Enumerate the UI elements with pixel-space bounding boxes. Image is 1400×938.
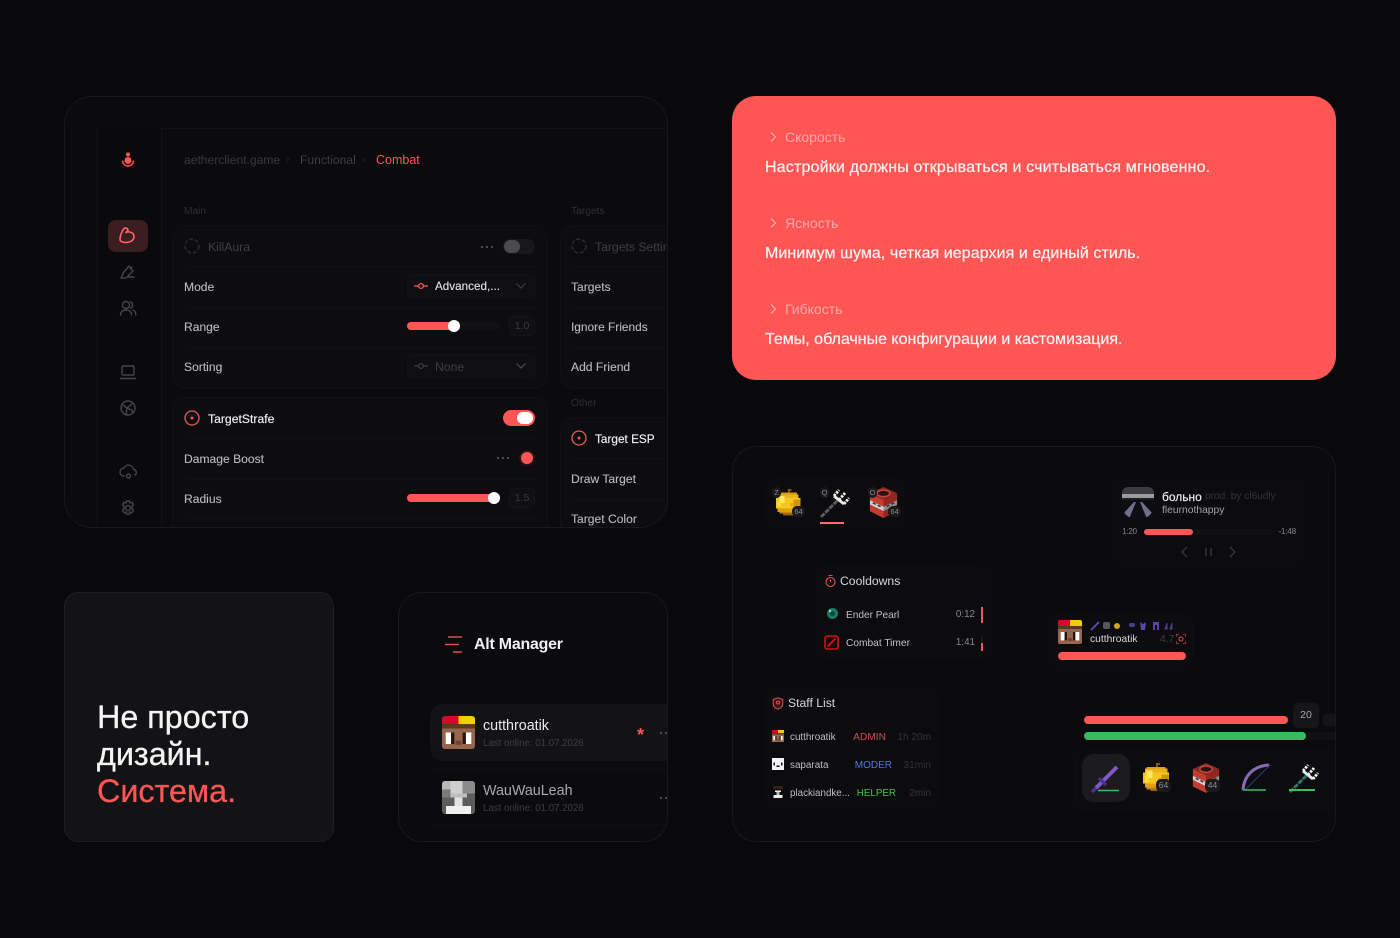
- title: больно: [1162, 490, 1202, 504]
- progress bar: [1144, 529, 1273, 535]
- panel: staff list: plackiandke...: [790, 788, 850, 799]
- label: Sorting: Sorting: [184, 360, 222, 374]
- label: Add Friend: Add Friend: [571, 360, 630, 374]
- avatar: [1058, 620, 1082, 644]
- icon: stopwatch: [826, 575, 836, 587]
- panel: cooldowns: [817, 566, 990, 658]
- heading: Alt Manager: Alt Manager: [474, 636, 563, 653]
- icon: dashed circle: [184, 238, 200, 254]
- panel: TargetStrafe settings: [172, 397, 548, 547]
- value: 1.5: 1.5: [515, 492, 529, 504]
- badge: count 64: [1156, 779, 1171, 792]
- panel: music player: [1114, 479, 1302, 566]
- asterisk: *: [637, 725, 644, 745]
- producer: prod. by cl6udly: [1205, 491, 1276, 502]
- name: WauWauLeah: [483, 783, 573, 799]
- badge: key Z: [772, 487, 781, 498]
- icon: players: [120, 300, 136, 316]
- badge: count 44: 44: [1208, 780, 1217, 790]
- durability bar: [820, 522, 844, 524]
- timer: 1:41: 1:41: [956, 637, 975, 648]
- icon: movement: [120, 265, 135, 279]
- slider: Range: [407, 322, 500, 330]
- label: TargetStrafe: TargetStrafe: [208, 412, 274, 426]
- heading: Main: Main: [184, 206, 206, 217]
- heading: slogan: дизайн.: [97, 736, 212, 772]
- badge: key O: O: [870, 488, 875, 497]
- icon: target: [571, 430, 587, 446]
- label: Combat Timer: Combat Timer: [846, 638, 910, 649]
- item: golden apple: [776, 489, 800, 516]
- icon: logo: [122, 152, 134, 167]
- album cover: [1122, 487, 1154, 518]
- badge: count: 64: [890, 507, 899, 516]
- panel: client settings window: [64, 96, 668, 528]
- time remaining: -1:48: [1278, 527, 1296, 536]
- slot: TNT: [1192, 763, 1220, 793]
- icon: shield: [772, 697, 784, 710]
- item: trident: [820, 489, 850, 518]
- dots: [660, 797, 669, 799]
- label: Damage Boost: Damage Boost: [184, 452, 264, 466]
- value: 1.0: [509, 316, 535, 336]
- principle: clarity: Минимум шума, четкая иерархия и единый стиль.: [765, 245, 1140, 262]
- slot: golden apple: [1143, 763, 1169, 791]
- icon: menu lines: [445, 636, 462, 653]
- dropdown: None: None: [435, 360, 464, 374]
- name: cutthroatik: [1090, 634, 1138, 645]
- principle: clarity: Ясность: [785, 215, 838, 231]
- slot: selected sword: [1082, 754, 1130, 802]
- value: 1.5: [509, 488, 535, 508]
- label: Targets: Targets: [571, 280, 611, 294]
- row: cutthroatik: [772, 730, 784, 742]
- label: Target Color: Target Color: [571, 512, 637, 526]
- panel: staff list: HELPER: [857, 788, 896, 799]
- heading: Cooldowns: Cooldowns: [840, 574, 900, 588]
- armor icons: [1090, 621, 1172, 631]
- rating: 4.7: [1160, 634, 1174, 645]
- badge: count 44: [1205, 779, 1220, 792]
- slider: Radius: [407, 494, 500, 502]
- badge: count 64: 64: [1159, 780, 1168, 790]
- panel: staff list: 31min: [904, 760, 931, 771]
- heading: Staff List: Staff List: [788, 696, 835, 710]
- panel: alt manager: [398, 592, 668, 842]
- panel: staff list: cutthroatik: [790, 732, 836, 743]
- last online: Last online: 01.07.2026: [483, 803, 584, 814]
- icon: target: [184, 410, 200, 426]
- breadcrumb: [184, 153, 420, 167]
- row: saparata: [772, 758, 784, 770]
- icon: active combat tab: [108, 220, 148, 252]
- panel: slogan card: [64, 592, 334, 842]
- principle: clarity: [765, 215, 1140, 262]
- badge: count: [792, 506, 805, 517]
- dropdown: Advanced: Advanced,...: [435, 280, 500, 293]
- panel: staff list: saparata: [790, 760, 828, 771]
- heading: Other: Other: [571, 398, 596, 409]
- label: Ignore Friends: Ignore Friends: [571, 320, 648, 334]
- principle: speed: [765, 129, 1210, 176]
- avatar: [442, 716, 475, 749]
- dropdown: Advanced: [407, 274, 535, 298]
- heading: Targets: Targets: [571, 206, 604, 217]
- principle: flexibility: [765, 301, 1122, 348]
- slot: bow: [1242, 764, 1270, 791]
- row: plackiandke: [774, 786, 782, 798]
- value: 20: [1293, 703, 1319, 728]
- value: 1.0: 1.0: [515, 320, 529, 332]
- label: KillAura: KillAura: [208, 240, 250, 254]
- label: Target ESP: Target ESP: [595, 432, 655, 446]
- value: 20: 20: [1300, 709, 1312, 721]
- icon: combat timer: [824, 635, 839, 650]
- health bar: [1058, 652, 1186, 660]
- heading: slogan: [97, 699, 249, 809]
- badge: key Q: Q: [822, 488, 827, 497]
- row: WauWauLeah: [442, 781, 667, 814]
- badge: key Z: Z: [774, 488, 779, 497]
- panel: coral principles card: [732, 96, 1336, 380]
- panel: hotbar: [1075, 750, 1337, 811]
- label: Draw Target: Draw Target: [571, 472, 636, 486]
- badge: key O: [868, 487, 877, 498]
- panel: staff list: 2min: [909, 788, 931, 799]
- toggle: off: [503, 239, 535, 254]
- icon: laptop: [120, 365, 136, 380]
- breadcrumb: aetherclient.game: [184, 153, 280, 167]
- hunger bar: [1084, 732, 1337, 740]
- toggle: on: [503, 410, 535, 426]
- panel: staff list: [765, 688, 938, 809]
- sidebar: [97, 128, 162, 548]
- avatar: [442, 781, 475, 814]
- panel: KillAura settings: [172, 225, 548, 389]
- panel: target HUD: [1049, 613, 1193, 669]
- badge: count: [888, 506, 901, 517]
- badge: key Q: [820, 487, 829, 498]
- heading: slogan: Система.: [97, 773, 236, 809]
- dots menu: [481, 246, 495, 248]
- panel: hotkey items: [765, 478, 904, 529]
- artist: fleurnothappy: [1162, 505, 1224, 516]
- icon: ender pearl: [827, 608, 838, 619]
- slot: trident: [1289, 764, 1319, 793]
- badge: count: 64: [794, 507, 803, 516]
- indicator: red dot: [521, 452, 533, 464]
- label: Radius: Radius: [184, 492, 222, 506]
- panel: Other list: [560, 417, 690, 547]
- label: Range: Range: [184, 320, 220, 334]
- last online: Last online: 01.07.2026: [483, 738, 584, 749]
- heading: slogan: Не просто: [97, 699, 249, 735]
- cooldown bar: [981, 635, 983, 651]
- breadcrumb: Combat: [376, 153, 420, 167]
- breadcrumb: ›: [286, 154, 290, 166]
- durability bar: [1289, 789, 1315, 791]
- dots menu: [497, 457, 511, 459]
- icon: globe: [120, 400, 136, 416]
- panel: staff list: MODER: [855, 760, 892, 771]
- dots: [660, 732, 669, 734]
- cooldown bar: [981, 607, 983, 623]
- player controls: [1181, 546, 1236, 558]
- timer: 0:12: 0:12: [956, 609, 975, 620]
- icon: cloud config: [119, 464, 137, 479]
- panel: HUD elements: [732, 446, 1336, 842]
- row: cutthroatik: [430, 704, 670, 761]
- breadcrumb: ›: [362, 154, 366, 166]
- panel: staff list: 1h 20m: [897, 732, 931, 743]
- principle: flexibility: Темы, облачные конфигурации и кастомизация.: [765, 331, 1122, 348]
- panel: staff list: ADMIN: [853, 732, 886, 743]
- label: Mode: Mode: [184, 280, 214, 294]
- item: TNT: [870, 487, 898, 518]
- panel: Targets list: [560, 225, 690, 389]
- name: cutthroatik: [483, 718, 549, 734]
- principle: speed: Настройки должны открываться и считываться мгновенно.: [765, 159, 1210, 176]
- secondary value chip: [1323, 714, 1343, 726]
- breadcrumb: Functional: [300, 153, 356, 167]
- principle: speed: Скорость: [785, 129, 845, 145]
- icon: dashed circle: [572, 238, 586, 254]
- icon: settings gear: [122, 500, 134, 515]
- time elapsed: 1:20: [1122, 527, 1137, 536]
- health bar: [1084, 716, 1288, 724]
- principle: flexibility: Гибкость: [785, 301, 842, 317]
- label: Ender Pearl: Ender Pearl: [846, 610, 899, 621]
- icon: crosshair: [1176, 634, 1186, 644]
- dropdown: None: [407, 354, 535, 378]
